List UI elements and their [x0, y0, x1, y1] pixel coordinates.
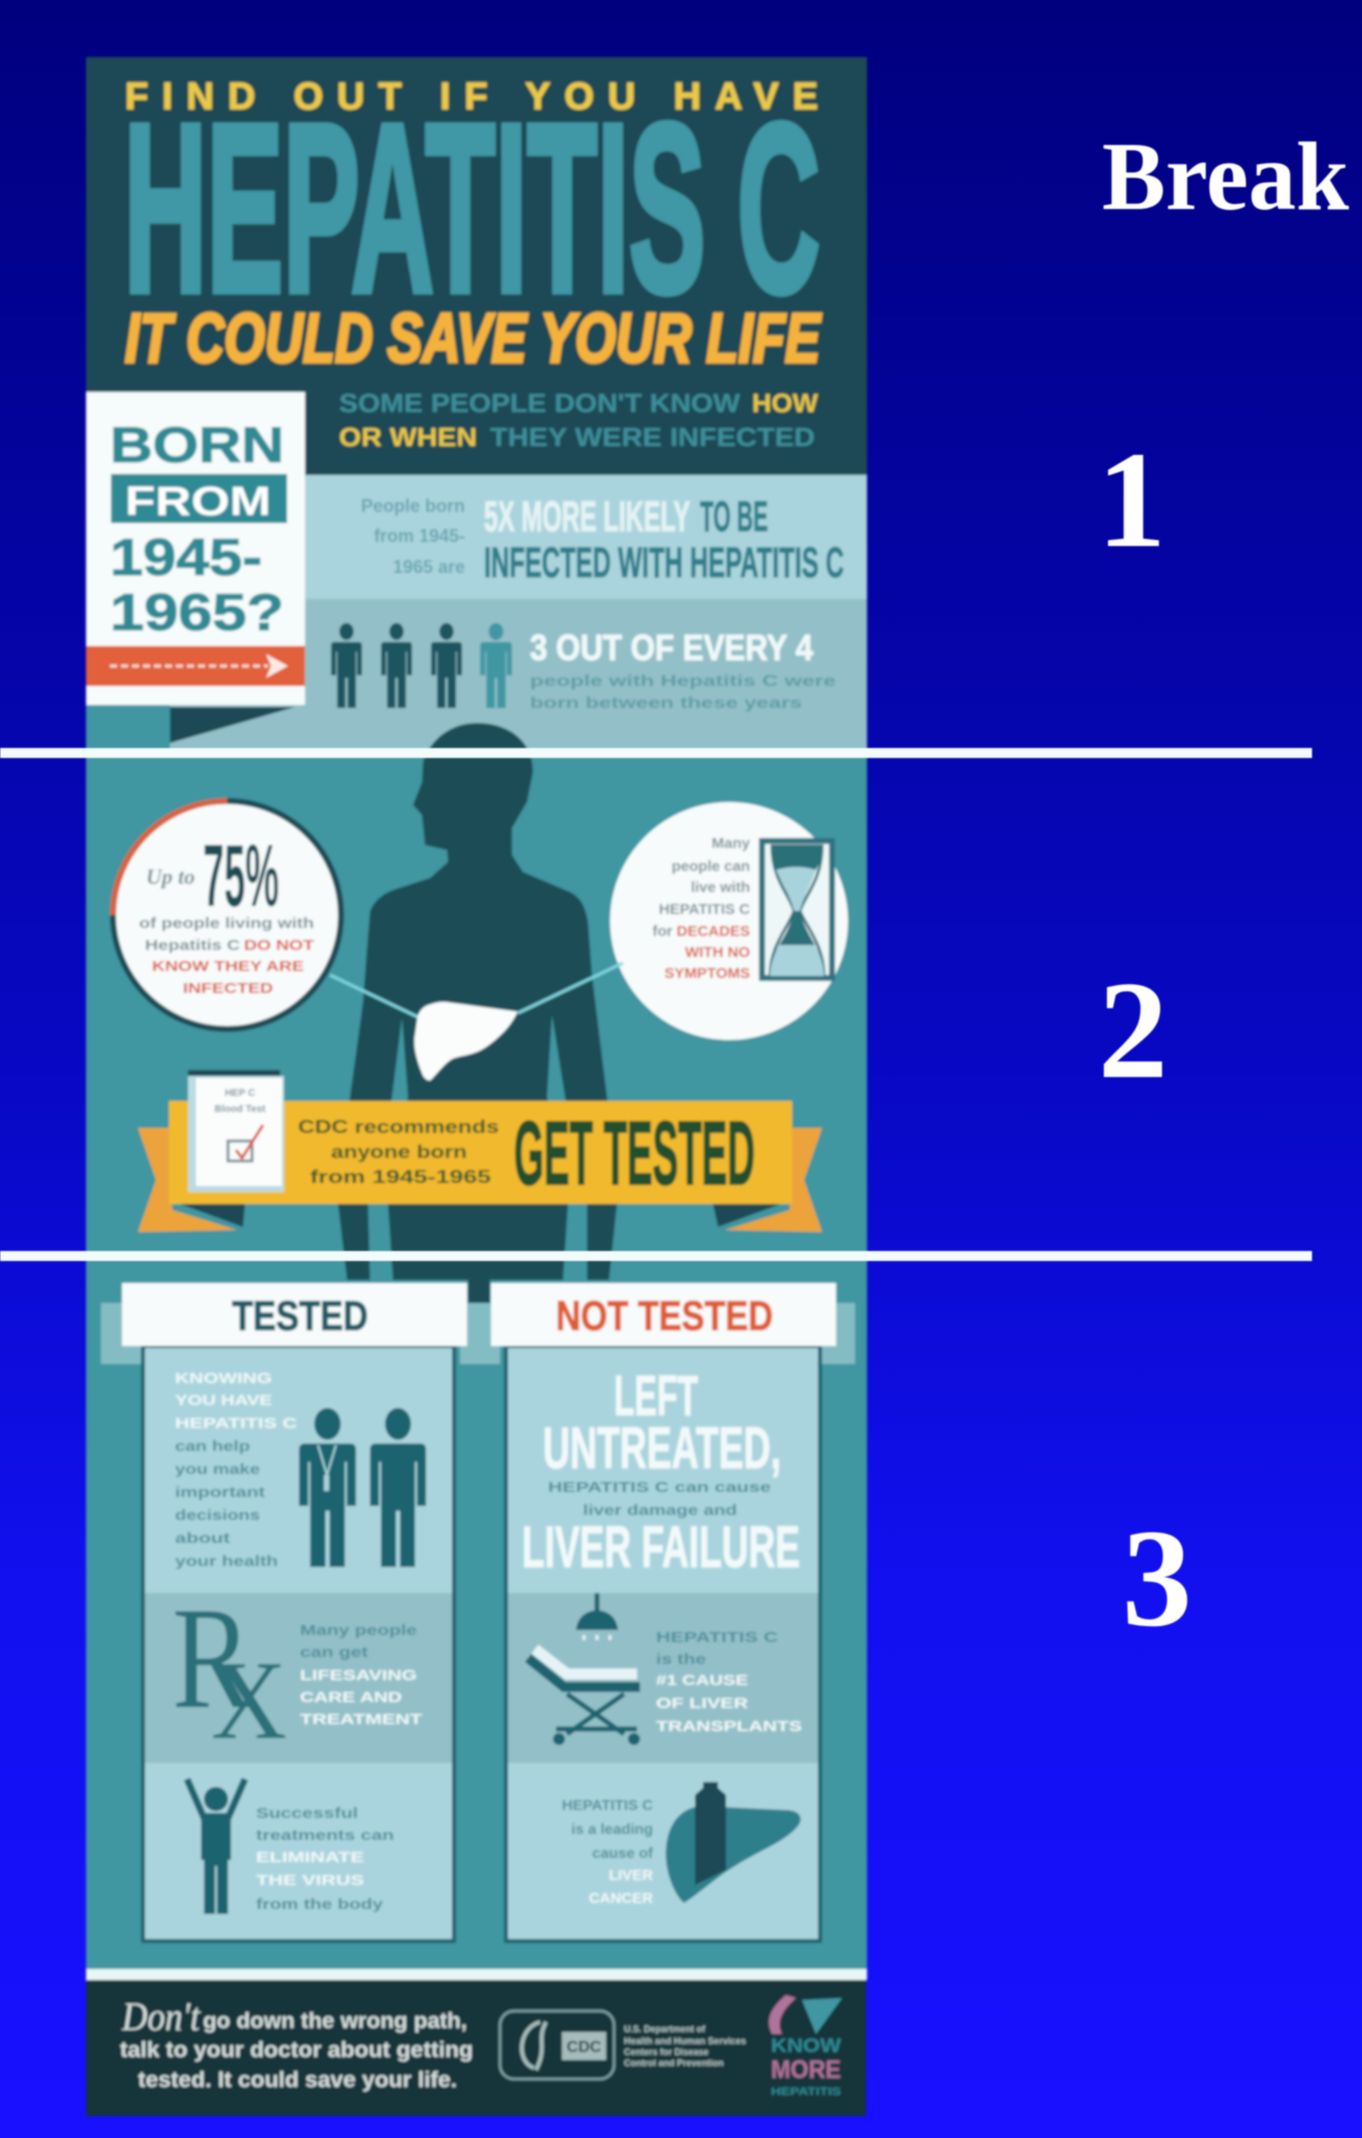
- 5x more likely stat: [484, 493, 844, 587]
- transplant text: OF LIVER: [656, 1695, 748, 1712]
- icon: blood test clipboard: HEP C: [225, 1088, 255, 1099]
- header note: THEY WERE INFECTED: [490, 422, 815, 452]
- cdc recommendation: from 1945-1965: [310, 1167, 491, 1187]
- stat description: [530, 673, 836, 712]
- knowing text: decisions: [175, 1507, 260, 1524]
- subtitle: it could save your life: IT COULD SAVE YOUR LIFE: [125, 299, 822, 377]
- lifesaving text: [300, 1622, 422, 1728]
- header note: OR WHEN: [339, 422, 477, 452]
- circle text: [652, 835, 751, 982]
- icon: doctor and patient: [299, 1408, 426, 1567]
- header panel: [86, 57, 867, 477]
- panel: 3 out of every 4: [86, 599, 867, 751]
- panel: not tested: [491, 1283, 836, 1941]
- header: tested: TESTED: [232, 1292, 368, 1339]
- label: break: Break: [1102, 123, 1349, 230]
- 5x more likely stat: 5X MORE LIKELY: [484, 493, 690, 541]
- hhs text: [624, 2024, 746, 2068]
- liver cancer text: [562, 1797, 654, 1907]
- header: not tested: NOT TESTED: [556, 1292, 773, 1339]
- icon: liver: [415, 1002, 517, 1080]
- circle text: WITH NO: [685, 944, 750, 961]
- icon: person arms raised: [187, 1779, 245, 1914]
- call to action: tested. It could save your life.: [138, 2067, 457, 2092]
- three out of four stat: 3 OUT OF EVERY 4: [530, 627, 813, 668]
- circle text: of people living with: [139, 915, 314, 932]
- liver cancer text: is a leading: [571, 1821, 653, 1838]
- orange arc: [113, 801, 227, 915]
- header note: [339, 388, 818, 452]
- circle text: KNOW THEY ARE: [152, 958, 304, 975]
- icon: blood test clipboard: Blood Test: [215, 1104, 266, 1115]
- transplant text: #1 CAUSE: [656, 1672, 748, 1689]
- icon: hospital bed: [528, 1649, 640, 1745]
- hhs text: U.S. Department of: [624, 2024, 706, 2034]
- call to action: go down the wrong path,: [203, 2008, 467, 2033]
- circle text: Many: [712, 835, 751, 852]
- lifesaving text: LIFESAVING: [300, 1667, 417, 1684]
- knowing text: YOU HAVE: [175, 1392, 272, 1409]
- call to action: talk to your doctor about getting: [120, 2037, 473, 2062]
- left untreated: [543, 1364, 781, 1481]
- stat description: people with Hepatitis C were: [530, 673, 836, 690]
- successful treatments text: from the body: [256, 1896, 384, 1913]
- circle text: live with: [691, 879, 750, 896]
- circle: 75 percent: [113, 801, 341, 1029]
- call to action: Don't: [121, 1994, 201, 2039]
- icon: surgical lamp: [576, 1593, 618, 1640]
- knowing text: your health: [175, 1553, 278, 1570]
- circle: decades with no symptoms: [610, 802, 848, 1040]
- cdc recommendation: CDC recommends: [298, 1117, 499, 1137]
- circle text: DO NOT: [244, 937, 314, 954]
- years: 1945-: [110, 529, 262, 587]
- successful treatments text: treatments can: [256, 1827, 394, 1844]
- liver cancer text: cause of: [592, 1845, 654, 1862]
- can cause text: HEPATITIS C can cause: [548, 1479, 771, 1496]
- arrow bar: [86, 646, 305, 686]
- lifesaving text: Many people: [300, 1622, 417, 1639]
- successful treatments text: [256, 1805, 394, 1913]
- cdc recommendation: [298, 1117, 499, 1187]
- header: tested: [122, 1283, 467, 1346]
- hhs text: Control and Prevention: [624, 2058, 724, 2068]
- left untreated: LEFT: [614, 1364, 698, 1428]
- header note: SOME PEOPLE DON'T KNOW: [339, 388, 740, 418]
- know more logo: MORE: [771, 2056, 841, 2084]
- knowing text: HEPATITIS C: [175, 1415, 297, 1432]
- circle: 75 percent: 75%: [203, 826, 279, 925]
- transplant text: is the: [656, 1651, 706, 1668]
- header note: HOW: [752, 388, 818, 418]
- icon: blood test clipboard: [188, 1070, 284, 1192]
- icon: four people: [331, 623, 512, 708]
- lifesaving text: TREATMENT: [300, 1711, 422, 1728]
- circle text: HEPATITIS C: [659, 901, 750, 918]
- can cause text: liver damage and: [583, 1502, 737, 1519]
- knowing text: about: [175, 1530, 230, 1547]
- circle text: for DECADES: [652, 923, 750, 940]
- middle band: [508, 1593, 818, 1763]
- cdc recommendation: anyone born: [331, 1142, 467, 1162]
- label: 2: 2: [1098, 953, 1168, 1108]
- banner: get tested: [138, 1070, 822, 1232]
- people born text: 1965 are: [393, 557, 465, 577]
- header: not tested: [491, 1283, 836, 1346]
- born from 1945-1965 box: [86, 392, 305, 705]
- connector lines: [330, 963, 623, 1018]
- circle text: [139, 915, 314, 997]
- successful treatments text: THE VIRUS: [256, 1872, 364, 1889]
- liver cancer text: HEPATITIS C: [562, 1797, 653, 1814]
- cdc logo: [500, 2011, 614, 2079]
- successful treatments text: Successful: [256, 1805, 358, 1822]
- from: [111, 474, 287, 524]
- 5x more likely stat: INFECTED WITH HEPATITIS C: [484, 539, 844, 587]
- from: FROM: [125, 478, 271, 524]
- transplant text: HEPATITIS C: [656, 1629, 778, 1646]
- divider line top: [0, 748, 1312, 758]
- hhs text: Centers for Disease: [624, 2047, 709, 2057]
- stat description: born between these years: [530, 695, 802, 712]
- circle text: people can: [672, 858, 750, 875]
- knowing text: KNOWING: [175, 1370, 272, 1387]
- liver failure: LIVER FAILURE: [522, 1515, 800, 1580]
- label: 1: 1: [1097, 423, 1166, 576]
- knowing text: [175, 1370, 297, 1570]
- lifesaving text: can get: [300, 1644, 368, 1661]
- knowing text: you make: [175, 1461, 260, 1478]
- 5x more likely stat: TO BE: [700, 493, 768, 541]
- knowing text: can help: [175, 1438, 250, 1455]
- icon: rx: X: [211, 1639, 287, 1763]
- years: 1965?: [110, 584, 284, 642]
- label: 3: 3: [1122, 1501, 1192, 1656]
- panel: 5x more likely: [305, 475, 867, 599]
- years: [110, 529, 284, 642]
- left untreated: UNTREATED,: [543, 1416, 781, 1481]
- knowing text: important: [175, 1484, 265, 1501]
- icon: rx: R: [172, 1577, 253, 1739]
- panel: tested: [122, 1283, 467, 1941]
- circle text: SYMPTOMS: [664, 965, 750, 982]
- lifesaving text: CARE AND: [300, 1689, 402, 1706]
- ribbon fold: [86, 705, 295, 751]
- successful treatments text: ELIMINATE: [256, 1849, 364, 1866]
- liver cancer text: LIVER: [609, 1867, 653, 1884]
- panel: body section: [86, 751, 867, 1971]
- know more logo: [769, 1995, 842, 2098]
- people born text: [361, 496, 465, 577]
- can cause text: [548, 1479, 771, 1519]
- up to: Up to: [146, 864, 195, 889]
- poster: [86, 57, 867, 2116]
- footer: [86, 1969, 867, 2116]
- arm gaps: [368, 1018, 408, 1280]
- people born text: People born: [361, 496, 465, 516]
- tagline: find out if you have: FIND OUT IF YOU HAVE: [125, 76, 818, 118]
- ribbon tails: [138, 1128, 822, 1232]
- banner: get tested: GET TESTED: [514, 1104, 755, 1204]
- hhs text: Health and Human Services: [624, 2036, 746, 2046]
- header ribbons: [101, 1303, 855, 1364]
- circle text: INFECTED: [183, 980, 273, 997]
- middle band: [145, 1593, 452, 1763]
- divider line bottom: [0, 1251, 1312, 1261]
- circle text: Hepatitis C: [145, 937, 240, 954]
- icon: liver with tower: [666, 1782, 801, 1903]
- cdc logo: CDC: [567, 2039, 602, 2056]
- transplant text: [656, 1629, 802, 1735]
- call to action: [120, 1994, 473, 2092]
- know more logo: HEPATITIS: [771, 2086, 841, 2098]
- born: BORN: [110, 417, 284, 473]
- know more logo: KNOW: [771, 2036, 841, 2057]
- people born text: from 1945-: [374, 526, 465, 546]
- liver cancer text: CANCER: [589, 1890, 653, 1907]
- transplant text: TRANSPLANTS: [656, 1718, 802, 1735]
- body silhouette: [338, 723, 617, 1303]
- icon: hourglass: [762, 841, 832, 978]
